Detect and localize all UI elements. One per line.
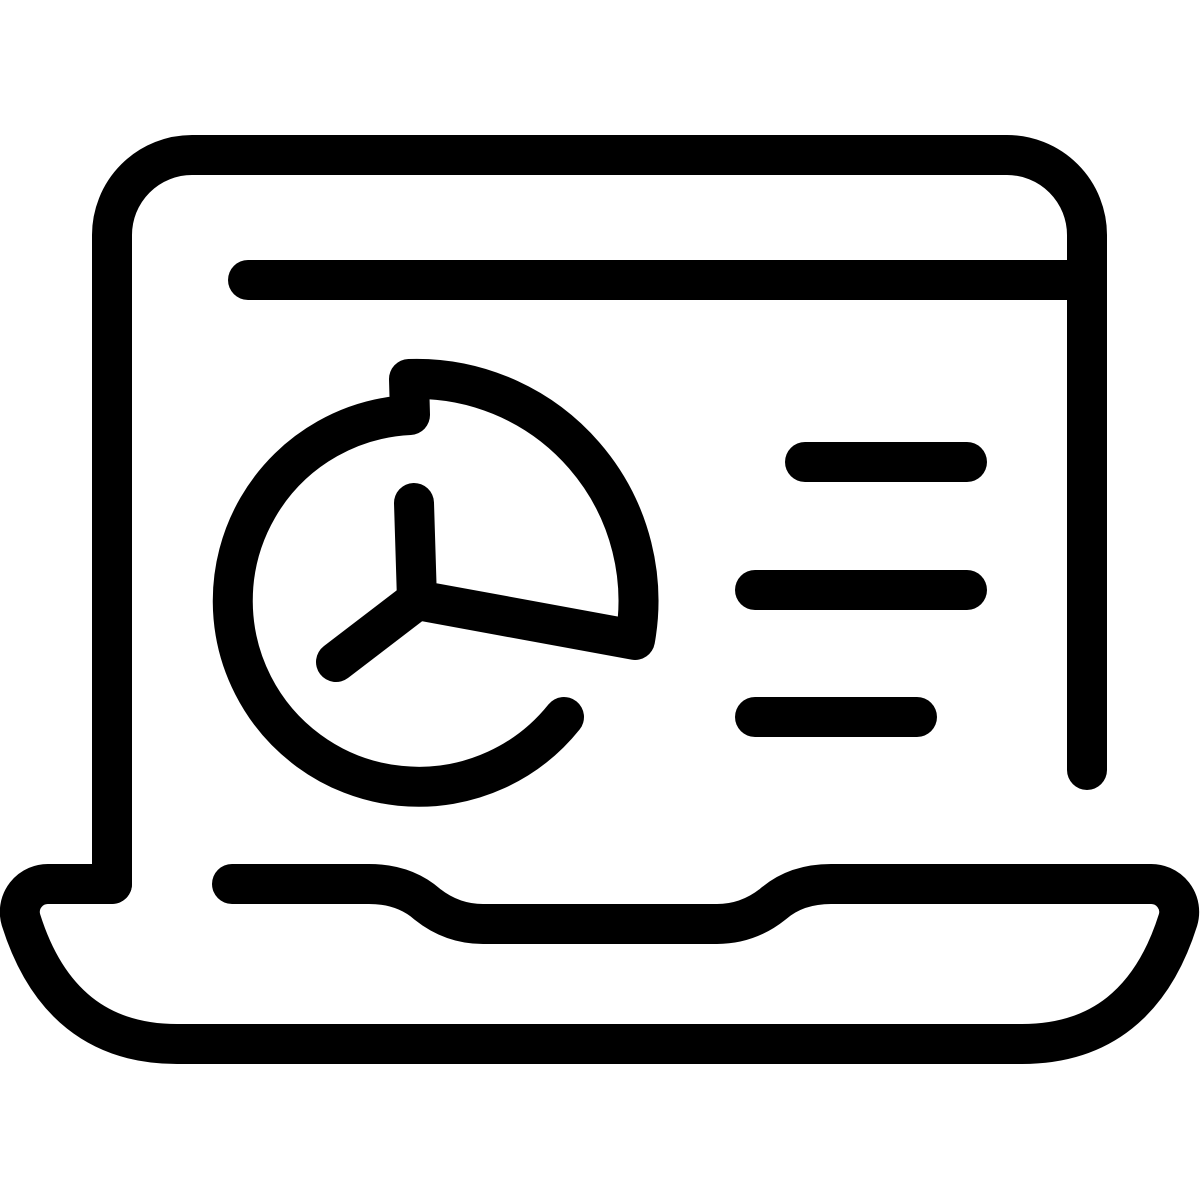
screen header line (248, 260, 1087, 300)
pie chart (233, 379, 638, 787)
laptop base (20, 884, 1179, 1044)
legend lines (755, 462, 967, 717)
laptop screen frame (112, 155, 1087, 884)
